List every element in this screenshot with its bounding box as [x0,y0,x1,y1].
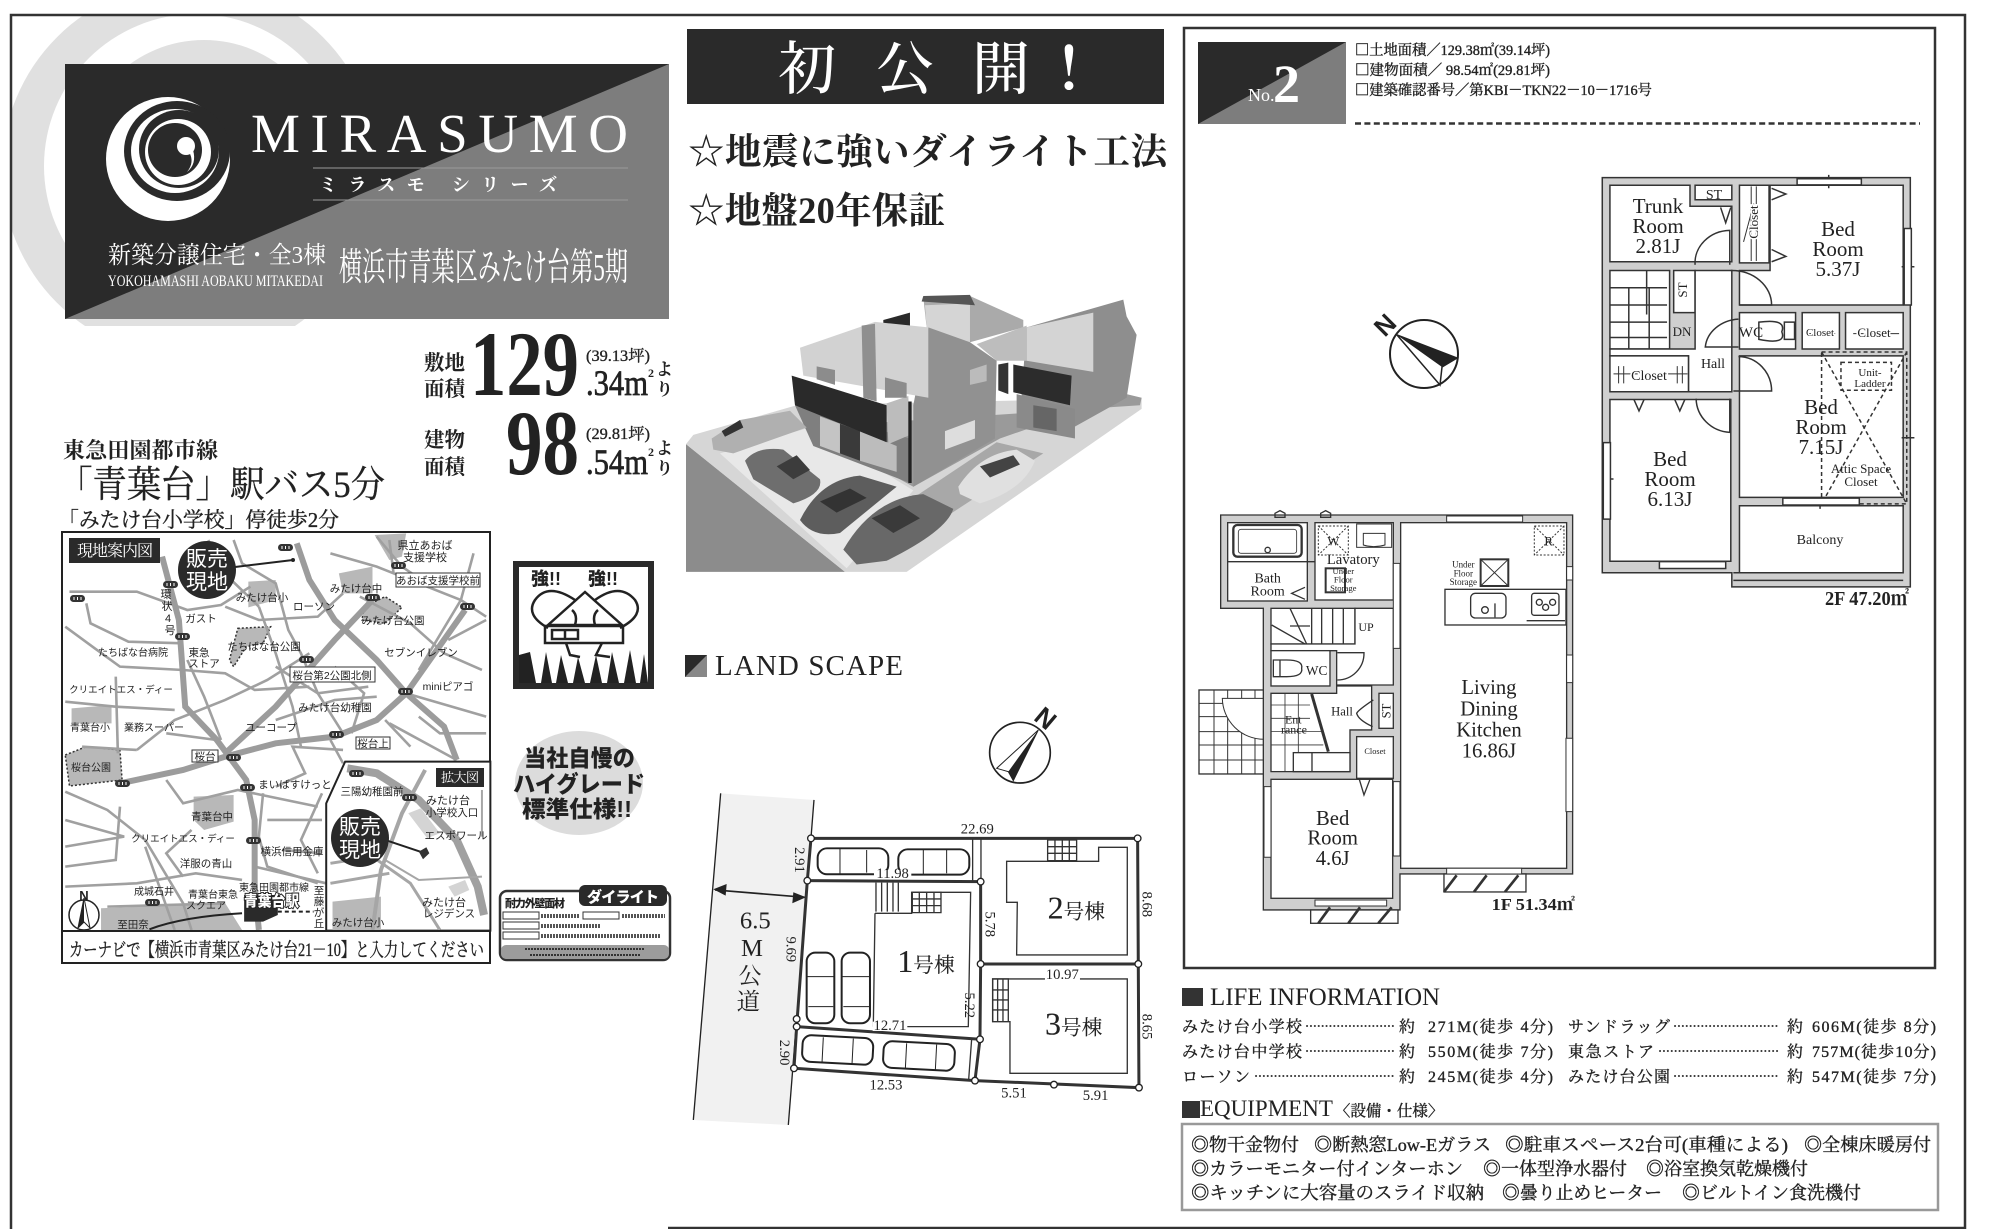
equipment list: ◎浴室換気乾燥機付 [1646,1159,1808,1179]
lot dimensions: 10.97 [1046,967,1079,983]
house data: □建築確認番号／第KBI－TKN22－10－1716号 [1355,79,1652,100]
map labels: miniピアゴ [423,680,473,693]
2F room labels: ST [1706,188,1723,203]
2F room labels: Room [1795,415,1847,439]
equipment list: ◎物干金物付 [1191,1135,1299,1155]
2F room labels: Bed [1653,447,1687,471]
map labels: たちばな台病院 [98,646,168,659]
lot dimensions: 12.53 [869,1078,902,1094]
site area figure: 面積 [424,377,468,401]
badge: daylight panel: 耐力外壁面材 [505,896,565,910]
nearby facilities: 606M(徒歩 8分) [1812,1018,1936,1036]
house data: □建物面積／ 98.54㎡(29.81坪) [1355,59,1550,80]
station label: 青葉台駅 [244,892,299,910]
vertical road labels: 環 [160,588,172,601]
1F room labels: 4.6J [1316,848,1350,870]
2F room labels: Trunk [1633,194,1684,218]
1F room labels: Under [1332,566,1354,576]
distance dots [1256,1026,1779,1076]
nearby facilities: 271M(徒歩 4分) [1428,1018,1553,1036]
1F room labels: WC [1306,663,1327,678]
1F room labels: rance [1281,722,1307,736]
badge: daylight panel [500,885,670,960]
lot dimensions: 5.91 [1083,1088,1108,1104]
1F room labels: Storage [1330,583,1357,593]
1F room labels: ST [1380,703,1394,718]
nearby facilities: 約 [1399,1068,1415,1086]
map labels: 至田奈 [117,918,149,931]
nearby facilities [1182,1018,1936,1086]
callout: high grade standard [513,731,645,835]
icon: earthquake strength badge [516,564,651,686]
equipment list: ◎一体型浄水器付 [1483,1159,1627,1179]
rear house [883,295,1023,342]
heading banner: first release: 初 [778,37,836,102]
1F room labels: Kitchen [1456,720,1522,742]
icon: floor plan compass [1368,308,1458,388]
callout: high grade standard: 当社自慢の [524,745,635,771]
map labels: 東急田園都市線 [239,881,309,894]
map labels: ユーコープ [245,722,297,734]
building area figure: 面積 [424,455,468,479]
1F room labels: Ent [1285,712,1302,726]
2F room labels: Closet [1844,474,1878,489]
equipment list: ◎駐車スペース2台可(車種による) [1505,1135,1788,1156]
heading banner: first release: 公 [876,37,934,102]
vertical road labels: 状 [162,599,172,613]
map labels: クリエイトエス・ディー [69,684,173,696]
nearby facilities: 547M(徒歩 7分) [1812,1068,1936,1086]
lot dimensions: 12.71 [873,1018,906,1034]
icon: north arrow: N [79,888,89,903]
map labels: みたけ台公園 [362,614,424,627]
2F room labels: Closet [1857,325,1891,340]
vertical road labels: 丘 [314,918,324,930]
2F area: 2F 47.20㎡ [1825,587,1909,610]
map labels: ローソン [293,601,335,613]
lot dimensions: 5.78 [981,911,997,937]
map labels: 成城石井 [134,885,174,898]
2F room labels: Closet [1806,327,1834,339]
building area figure: り [656,459,673,478]
map labels: セブンイレブン [384,646,458,659]
lot boundary [794,838,1139,1088]
2F room labels: Bed [1821,217,1855,241]
map labels: みたけ台中 [330,582,382,595]
2F room labels: 5.37J [1816,257,1860,281]
callout: high grade standard: ハイグレード [513,771,645,797]
vertical road labels: 藤 [314,896,325,908]
2F room labels: Hall [1701,357,1725,372]
2F room labels: WC [1739,325,1763,341]
lot dimensions: 5.22 [961,992,977,1018]
panel: enlarged map: みたけ台小 [332,916,385,929]
map labels: 業務スーパー [124,721,184,734]
map labels: 青葉台東急 [188,888,238,901]
label: map title: 現地案内図 [77,541,153,560]
location title: 横浜市青葉区みたけ台第5期 [339,247,628,289]
vertical road labels: 号 [164,624,176,637]
nearby facilities: 757M(徒歩10分) [1812,1043,1936,1061]
vertical road labels [160,588,325,930]
house data [1355,39,1652,100]
nearby facilities: サンドラッグ [1568,1018,1670,1036]
building area figure: .54m [586,442,648,482]
callout: high grade standard: 標準仕様!! [522,796,632,822]
lot dimensions: 22.69 [961,821,994,837]
strip: car navigation note: カーナビで【横浜市青葉区みたけ台21－10】と入力してください [69,939,484,961]
1F area: 1F 51.34㎡ [1492,895,1575,914]
2F room labels: 6.13J [1648,487,1692,511]
nearby facilities: 約 [1399,1018,1415,1036]
1F room labels: Hall [1331,705,1353,719]
parked cars [802,848,969,1071]
map labels: みたけ台小 [236,591,289,604]
1F room labels: Living [1461,677,1517,699]
map labels: スクエア [186,900,226,912]
map roads and parks [65,533,486,930]
block: No.2 [1198,42,1346,124]
1F room labels: Storage [1450,577,1477,587]
nearby facilities: ローソン [1182,1069,1250,1086]
heading: land scape: LAND SCAPE [715,650,903,682]
1F room labels [1251,535,1553,870]
2F room labels: 7.15J [1799,435,1843,459]
map labels: 支援学校 [403,550,447,564]
nearby facilities: みたけ台小学校 [1182,1018,1303,1036]
vertical road labels: 4 [165,613,171,625]
equipment list: ◎キッチンに大容量のスライド収納 [1191,1183,1484,1203]
1F room labels: Lavatory [1327,552,1380,568]
vertical road labels: 至 [314,885,324,897]
map label boxes: 桜台上 [357,737,389,750]
building 2 label: 2号棟 [1048,889,1105,925]
map labels: 桜台公園 [71,761,111,774]
map labels: 青葉台中 [191,810,233,823]
1F room labels: W [1327,535,1339,549]
panel: enlarged map: レジデンス [423,907,475,920]
nearby facilities: 約 [1787,1068,1803,1086]
1F room labels: UP [1358,620,1374,634]
building area figure: 建物 [424,428,465,452]
map labels: みたけ台幼稚園 [298,701,372,714]
icon: earthquake strength badge: 強!! [531,568,561,589]
heading banner: first release: 開 [972,37,1030,102]
road 6.5M [693,793,814,1125]
panel: area map [62,532,490,963]
banner: MIRASUMO [65,64,669,319]
1F room labels: Floor [1454,568,1473,578]
panel: enlarged map: 拡大図 [441,770,479,785]
map label boxes: 桜台第2公園北側 [292,669,372,682]
series name: ミラスモ シリーズ [319,175,557,195]
nearby facilities: 東急ストア [1568,1043,1654,1061]
road 6.5M: M [741,935,763,962]
block: No.2: No. [1248,85,1274,105]
2F room labels: Closet [1631,369,1667,384]
map labels: 東急 [188,646,210,659]
marker: sales site [178,541,295,599]
feature: ground warranty: ☆地盤20年保証 [688,190,945,231]
heading: LIFE INFORMATION [1210,984,1440,1011]
1F room labels: 16.86J [1462,741,1516,763]
lot dimensions: 8.68 [1138,891,1154,917]
panel: site plan [693,701,1154,1125]
section: life information [1182,984,1936,1086]
house data: □土地面積／129.38㎡(39.14坪) [1355,39,1550,60]
building 1 label: 1号棟 [897,943,955,979]
site area figure: 2 [648,366,654,380]
panel: enlarged map: 三陽幼稚園前 [340,785,404,798]
map labels: 横浜信用金庫 [260,845,324,858]
panel: floor plan sheet [1182,28,1938,1210]
access information: 東急田園都市線 [63,438,218,463]
2F room labels: Attic Space [1831,461,1891,476]
1F fixtures [1228,511,1573,923]
access information [58,438,385,532]
vertical road labels: が [314,906,325,919]
icon: north arrow [69,888,99,930]
equipment list: ◎全棟床暖房付 [1804,1134,1931,1155]
site area figure: .34m [586,363,648,403]
2F room labels: DN [1673,324,1692,339]
equipment list: ◎カラーモニター付インターホン [1191,1159,1463,1179]
map label boxes: あおば支援学校前 [396,574,480,587]
building area figure: 2 [648,445,654,459]
panel: enlarged map: みたけ台 [422,895,466,909]
map labels: 青葉台小 [70,721,110,734]
map labels: ストア [188,658,220,670]
lot dimensions [776,821,1154,1104]
map labels: まいばすけっと [258,779,332,791]
1F room labels: Bed [1316,808,1350,830]
building 3 label: 3号棟 [1045,1005,1103,1041]
1F room labels: Closet [1364,747,1386,756]
rendering: 3D building view [686,295,1142,572]
site area figure [424,313,673,415]
icon: swirl logo [106,97,230,221]
map labels: クリエイトエス・ディー [131,833,235,845]
map labels: たちばな台公園 [227,640,301,653]
marker: sales site: 販売 [186,548,228,571]
road 6.5M: 6.5 [740,907,771,934]
equipment list [1182,1124,1938,1210]
left house [792,322,997,487]
access information: 「青葉台」駅バス5分 [58,464,385,506]
lot dimensions: 2.90 [776,1040,792,1065]
lot dimensions: 9.69 [783,936,799,962]
nearby facilities: 245M(徒歩 4分) [1428,1068,1553,1086]
map labels: 県立あおば [398,538,452,552]
road 6.5M: 公 [738,963,762,989]
strip: car navigation note [62,931,490,963]
1F room labels: Under [1452,559,1475,569]
nearby facilities: みたけ台公園 [1568,1068,1670,1086]
panel: enlarged map: 販売 [339,816,381,839]
nearby facilities: みたけ台中学校 [1182,1043,1303,1061]
lot dimensions: 11.98 [876,866,909,882]
map label boxes: 桜台 [194,750,216,763]
floor plan: 1F [1199,511,1575,923]
lot dimensions: 8.65 [1138,1014,1154,1039]
1F room labels: R [1544,535,1553,549]
2F room labels: Room [1632,214,1684,238]
nearby facilities: 約 [1787,1043,1803,1061]
marker: sales site: 現地 [186,571,228,594]
lot corner markers [791,835,1142,1091]
icon: earthquake strength badge: 強!! [588,568,618,589]
label: map title [69,538,160,563]
subtitle: 新築分譲住宅・全3棟 [108,242,326,269]
2F room labels: Balcony [1797,533,1843,548]
badge: daylight panel: ダイライト [587,888,659,906]
equipment list: ◎ビルトイン食洗機付 [1682,1183,1861,1203]
heading banner: first release: ！ [1040,37,1098,102]
2F room labels: Bed [1804,395,1838,419]
site area figure: り [656,380,673,399]
2F room labels: 2.81J [1636,234,1680,258]
panel: enlarged map: 現地 [339,839,381,862]
panel: enlarged map: 小学校入口 [426,806,478,819]
romanised location: YOKOHAMASHI AOBAKU MITAKEDAI [108,273,323,290]
site area figure: 129 [470,313,579,415]
map labels: 洋服の青山 [180,857,232,870]
icon: compass: N [1029,701,1062,736]
nearby facilities: 約 [1399,1043,1415,1061]
heading banner: first release [687,29,1164,104]
nearby facilities: 550M(徒歩 7分) [1428,1043,1553,1061]
brand name: MIRASUMO [251,103,628,164]
building area figure: 98 [506,392,579,494]
section: equipment [1182,1096,1938,1210]
icon: compass [990,701,1062,783]
nearby facilities: 約 [1787,1018,1803,1036]
panel: enlarged map: エスポワール [424,830,488,842]
access information: 「みたけ台小学校」停徒歩2分 [58,508,339,532]
map labels: ガスト [185,613,217,625]
map labels [69,538,473,931]
equipment list: ◎曇り止めヒーター [1502,1183,1662,1203]
1F room labels: Room [1251,585,1285,600]
heading: EQUIPMENT〈設備・仕様〉 [1200,1096,1443,1121]
bus stops [70,544,475,906]
background swirl [12,16,345,326]
lot dimensions: 2.91 [791,847,807,873]
building area figure [424,392,673,494]
icon: floor plan compass: N [1368,308,1402,342]
building area figure: よ [656,439,673,458]
1F room labels: Room [1307,827,1358,849]
site area figure: 敷地 [424,351,465,375]
building outlines [873,840,1127,1073]
lot dimensions: 5.51 [1001,1085,1027,1101]
2F room labels [1631,188,1891,548]
equipment list: ◎断熱窓Low-Eガラス [1314,1135,1491,1155]
cars [712,411,1035,564]
site area figure: よ [656,360,673,379]
road 6.5M: 道 [737,988,760,1015]
2F room labels: Room [1644,467,1696,491]
right house [977,300,1137,439]
building area figure: (29.81坪) [586,425,650,443]
1F room labels: Floor [1334,575,1353,585]
map label boxes [192,573,480,763]
1F room labels: Dining [1460,699,1518,721]
panel: enlarged map: みたけ台 [426,793,470,807]
block: No.2: 2 [1273,54,1300,114]
2F room labels: Closet [1746,205,1761,239]
2F room labels: Ladder [1854,378,1886,390]
panel: enlarged map [326,762,490,931]
2F room labels: ST [1675,282,1690,298]
floor plan: 2F [1602,175,1914,610]
2F room labels: Unit- [1858,367,1882,379]
feature: earthquake resistant method: ☆地震に強いダイライト工法 [688,131,1170,172]
site area figure: (39.13坪) [586,347,650,365]
1F room labels: Bath [1254,571,1281,586]
2F room labels: Room [1812,237,1864,261]
